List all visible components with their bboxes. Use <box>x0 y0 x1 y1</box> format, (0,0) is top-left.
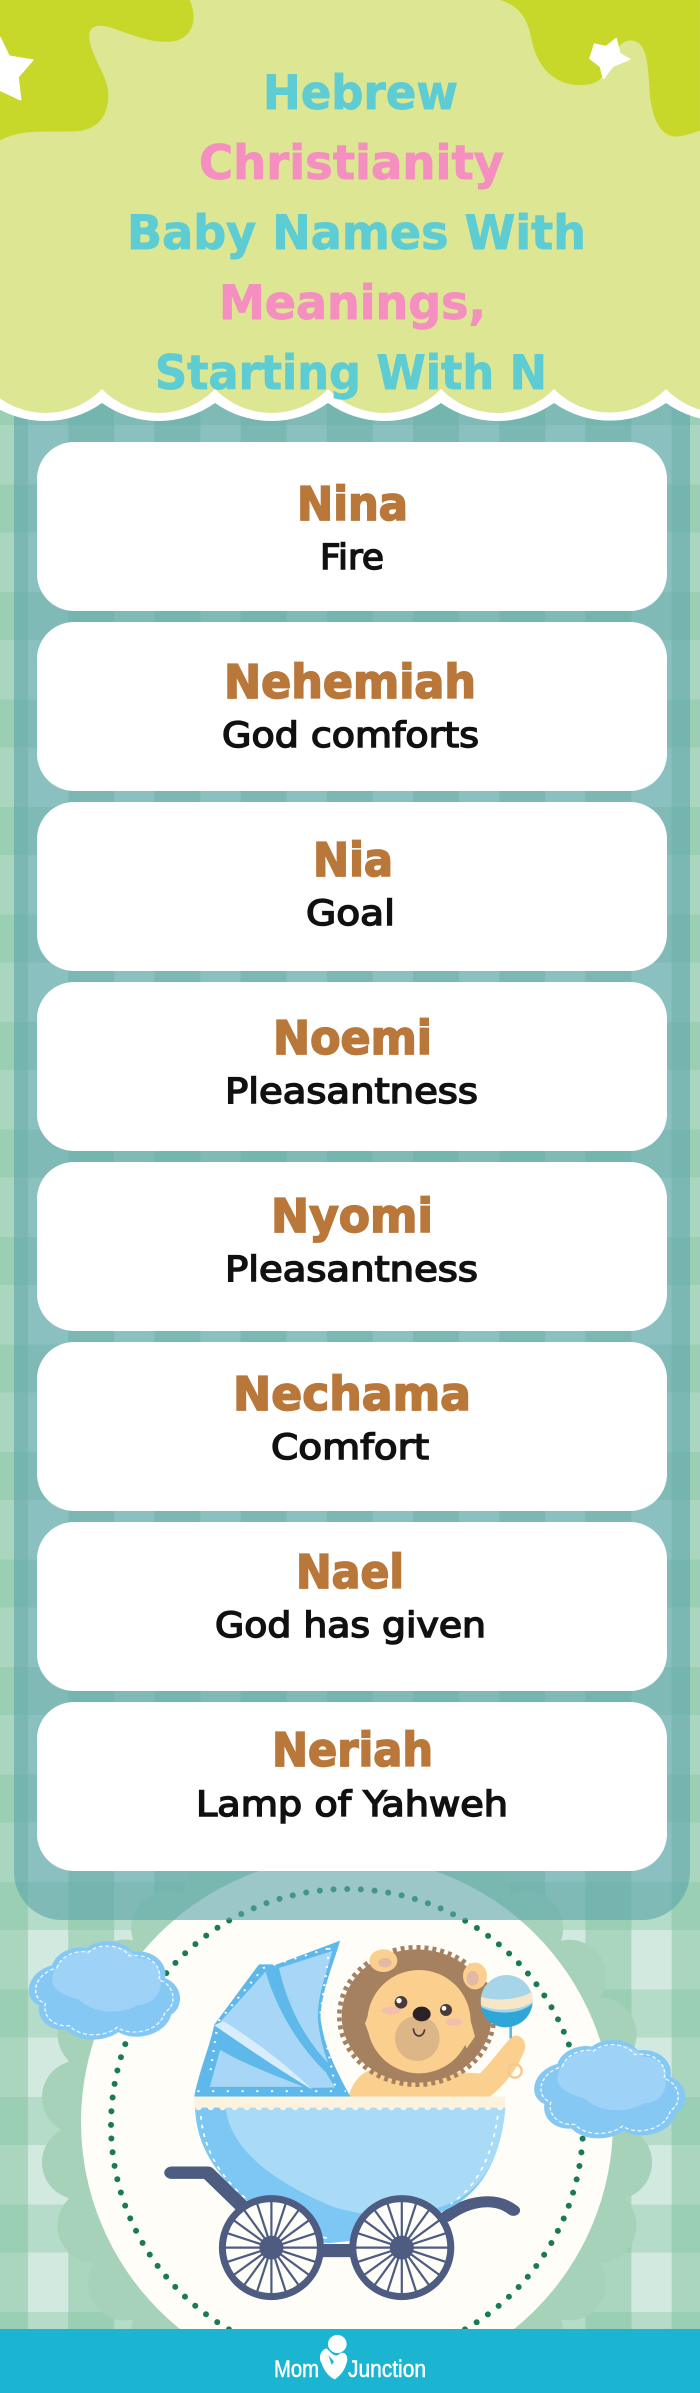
icon: rattle <box>481 1975 533 2038</box>
pram trim <box>194 2097 505 2108</box>
icon: pram <box>172 1941 513 2257</box>
lime blobs and stars <box>0 0 700 140</box>
card: Nina: Nina <box>297 477 408 531</box>
card: Nina: Fire <box>320 538 384 578</box>
illustration: lion in pram <box>172 1941 533 2298</box>
pram canopy <box>194 1941 350 2097</box>
card: Nia: Nia <box>313 833 393 887</box>
header scalloped white trim <box>0 0 700 421</box>
translucent teal panel <box>14 370 690 1920</box>
card: Nyomi <box>37 1162 667 1331</box>
dotted ring <box>111 1889 583 2361</box>
card: Nia <box>37 802 667 971</box>
icon: left wheel <box>221 2198 321 2298</box>
card: Nehemiah: God comforts <box>222 716 479 756</box>
card: Nia: Goal <box>306 894 395 934</box>
card: Noemi <box>37 982 667 1151</box>
card: Nechama: Comfort <box>271 1428 429 1468</box>
title: Starting With N <box>155 346 547 401</box>
card: Nael <box>37 1522 667 1691</box>
card: Noemi: Pleasantness <box>225 1072 478 1112</box>
card: Nael: Nael <box>296 1545 404 1599</box>
icon: right wheel <box>352 2198 452 2298</box>
card: Nechama: Nechama <box>233 1367 471 1421</box>
card: Noemi: Noemi <box>273 1011 432 1065</box>
icon: lion <box>339 1947 525 2097</box>
logo: Mom <box>274 2356 319 2383</box>
title: Christianity <box>199 136 504 191</box>
footer bar <box>0 2329 700 2393</box>
cream circle <box>81 1856 613 2388</box>
title: Meanings, <box>219 276 486 331</box>
icon: right cloud <box>536 2041 684 2137</box>
card: Nechama <box>37 1342 667 1511</box>
card: Neriah <box>37 1702 667 1871</box>
card: Nael: God has given <box>215 1606 486 1646</box>
card: Neriah: Neriah <box>272 1723 433 1777</box>
card: Nyomi: Pleasantness <box>225 1250 478 1290</box>
header <box>0 0 700 421</box>
card: Nehemiah: Nehemiah <box>224 655 476 709</box>
icon: left cloud <box>31 1943 178 2038</box>
title <box>127 66 586 401</box>
card: Nehemiah <box>37 622 667 791</box>
title: Hebrew <box>263 66 458 121</box>
card: Neriah: Lamp of Yahweh <box>196 1785 508 1825</box>
header green background <box>0 0 700 413</box>
pram handle and axle <box>172 2173 243 2207</box>
card: Nina <box>37 442 667 611</box>
logo <box>274 2335 426 2383</box>
title: Baby Names With <box>127 206 586 261</box>
pram basket <box>195 2107 505 2243</box>
card: Nyomi: Nyomi <box>271 1189 433 1243</box>
logo: Junction <box>348 2356 426 2383</box>
scalloped green badge behind circle <box>46 1829 648 2393</box>
